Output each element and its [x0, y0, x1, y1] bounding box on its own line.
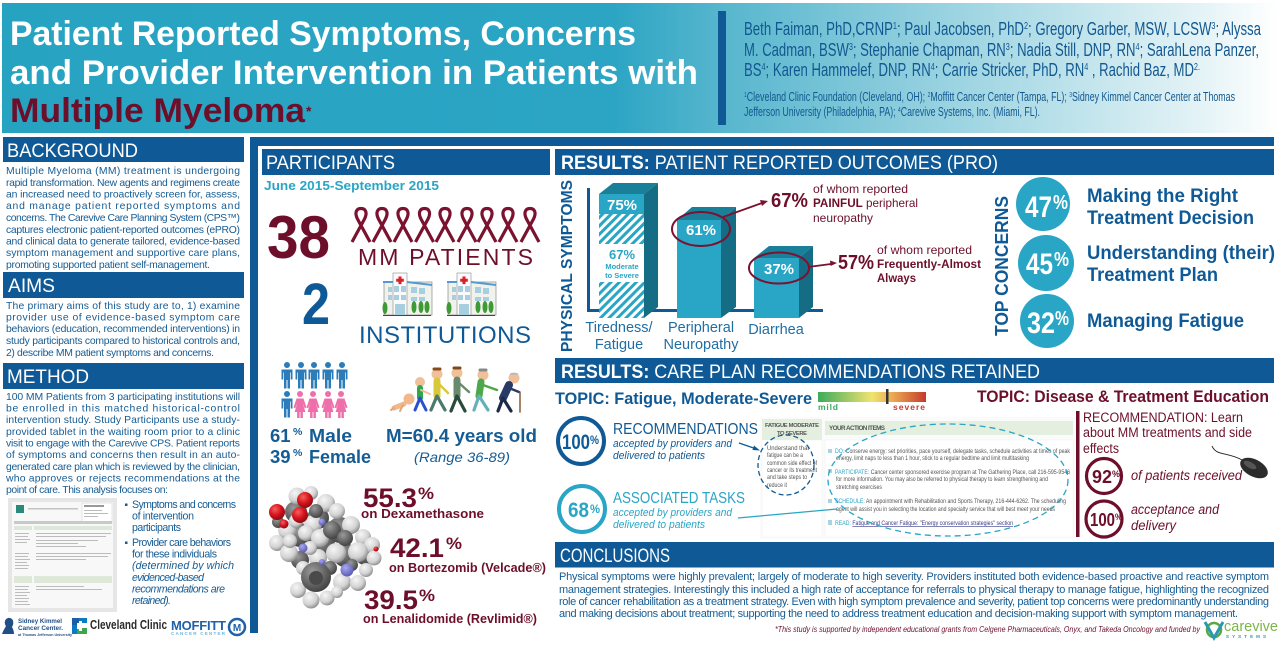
callout: diarrhea frequency: of whom reported [877, 243, 972, 257]
logo: Carevive [1205, 618, 1278, 639]
text: method body: generated care plan which is reviewed by the clinician, [6, 462, 240, 473]
text: focus bullets: recommendations are [132, 584, 225, 596]
authors: 4 [931, 62, 935, 73]
stat: 92% received: of patients received [1131, 468, 1242, 483]
stat: gender: % [293, 447, 303, 459]
care plan excerpt: DO: Conserve energy: set priorities, pace yourself, delegate tasks, schedule activities at times of peak [835, 448, 1071, 455]
concern: fatigue: 32 [1027, 307, 1055, 340]
text: conclusions body: and making decisions about treatment; supporting the need to address treatment education and decision-making support with symptom management. [559, 608, 1238, 620]
stat: dexamethasone [361, 483, 484, 521]
heading: method: METHOD [7, 366, 89, 388]
title: Patient Reported Symptoms, Concerns [10, 15, 636, 53]
heading: conclusions [555, 542, 1274, 568]
logo: Moffitt: CANCER CENTER [171, 631, 226, 636]
stat: age: M=60.4 years old [386, 425, 537, 446]
text: conclusions body: Physical symptoms were highly prevalent; largely of moderate to high severity. Providers instituted both evidence-based proactive and reactive symptom [559, 571, 1269, 583]
text: background body: symptom management and supportive care plans, [6, 248, 240, 259]
panel: results care plan [555, 358, 1274, 539]
text: method body: provided tablet in the waiting room prior to a clinic [6, 427, 240, 438]
callout: painful neuropathy [723, 182, 918, 225]
stat: bortezomib: on Bortezomib (Velcade®) [389, 561, 546, 575]
care plan excerpt: READ: Fatigue and Cancer Fatigue: "Energy conservation strategies" section [835, 520, 1013, 527]
axis title: PHYSICAL SYMPTOMS [559, 180, 576, 352]
text: aims body: study participants compared to historical controls and, [6, 336, 240, 347]
logo: Sidney Kimmel: Cancer Center. [18, 625, 63, 632]
authors: 4 [761, 62, 766, 73]
affiliations: Cleveland Clinic Foundation (Cleveland, OH); [747, 90, 928, 104]
text: focus bullets: of intervention [132, 510, 194, 522]
authors: 3 [849, 42, 853, 53]
header banner [2, 3, 1278, 133]
heading: results PRO: RESULTS: PATIENT REPORTED OUTCOMES (PRO) [561, 152, 998, 174]
text: background body: an increased need to proactively screen for, assess, [6, 190, 240, 200]
text: method body: intervention study. Study Participants use a study- [6, 415, 240, 426]
concern: treatment plan: % [1054, 249, 1069, 271]
stat: 100% recommendations: accepted by providers and [613, 438, 733, 450]
text: aims body: behaviors (education, recommended interventions) in [6, 324, 240, 335]
text: method body: point of care. This analysis focuses on: [6, 485, 168, 496]
affiliations: 3 [1069, 92, 1072, 99]
heading: aims: AIMS [8, 275, 55, 297]
severity scale [818, 389, 926, 412]
stat: 68% associated tasks: 68 [568, 499, 589, 522]
panel: conclusions [555, 542, 1274, 620]
stat: age [386, 368, 537, 465]
text: background body: promoting supported patient self-management. [6, 260, 210, 271]
stat: 100% recommendations: RECOMMENDATIONS [613, 421, 758, 438]
authors: ; Karen Hammelef, DNP, RN [766, 60, 931, 80]
stat: 2 institutions [302, 272, 531, 349]
panel: background [3, 137, 244, 271]
authors: 3 [1006, 42, 1010, 53]
authors: , Rachid Baz, MD [1088, 60, 1194, 80]
authors: 2. [1194, 62, 1200, 73]
stat: gender: 39 [270, 446, 291, 467]
stat: gender: Male [309, 425, 352, 446]
care plan excerpt: SCHEDULE: An appointment with Rehabilitation and Sports Therapy, 216-444-6262. The scheduling [835, 498, 1066, 505]
recommendation: education: about MM treatments and side [1083, 425, 1252, 440]
authors: ; Gregory Garber, MSW, LCSW [1028, 19, 1211, 39]
text: aims body: provider use of evidence-based symptom care [6, 312, 240, 324]
authors: 3 [1211, 21, 1216, 32]
concern: treatment plan [1018, 235, 1275, 291]
care plan excerpt: Understand that [767, 445, 809, 452]
text: aims body: The primary aims of this study are to, 1) examine [6, 301, 240, 312]
stat: 100% acceptance [1086, 501, 1219, 537]
category labels: Diarrhea [748, 322, 805, 338]
category labels [585, 320, 805, 353]
panel: aims [3, 272, 244, 359]
bar: tiredness: 75% [607, 197, 637, 214]
arrow [723, 200, 768, 217]
icon: gender pictogram [282, 362, 348, 418]
text: method body: visit to engage with the Carevive CPS. Patient reports [6, 438, 240, 450]
affiliations: 4 [898, 107, 901, 114]
heading: background [3, 137, 244, 162]
stat: bortezomib: 42.1 [390, 533, 444, 563]
concern: treatment decision [1016, 177, 1254, 231]
text: method body: of symptoms and concerns then result in an auto- [6, 450, 240, 461]
affiliations: Moffitt Cancer Center (Tampa, FL); [930, 90, 1069, 104]
affiliations: Jefferson University (Philadelphia, PA); [744, 105, 960, 119]
category labels: Peripheral [668, 320, 734, 336]
institution logos [2, 618, 245, 637]
authors: 2 [1024, 21, 1028, 32]
panel: method [3, 363, 244, 612]
stat: 38 patients [267, 204, 539, 271]
stat: 38 patients: 38 [267, 204, 330, 271]
text: conclusions body: role of cancer rehabilitation as a treatment strategy. Even with high symptom prevalence and severity, patient top concerns were predominantly understanding [559, 596, 1269, 608]
stat: 68% associated tasks [559, 486, 745, 532]
care plan excerpt [758, 417, 1075, 539]
callout: diarrhea frequency [808, 243, 981, 285]
authors: Beth Faiman, PhD,CRNP [744, 19, 947, 39]
stat: 38 patients: MM PATIENTS [358, 244, 533, 270]
care plan excerpt: YOUR ACTION ITEMS [829, 425, 885, 432]
text: background body: concerns. The Carevive Care Planning System (CPS™) [6, 213, 240, 224]
care plan excerpt: for more information. You may also be referred to physical therapy to learn strengthening and [836, 476, 1048, 483]
text: method body [5, 392, 240, 496]
concern: treatment plan: Understanding (their) [1087, 243, 1275, 264]
stat: age: (Range 36-89) [414, 449, 510, 465]
bar: peripheral neuropathy [672, 207, 736, 318]
text: focus bullets: Provider care behaviors [132, 537, 231, 549]
top concerns [992, 177, 1275, 348]
stat: gender: 61 [270, 425, 291, 446]
stat: dexamethasone: on Dexamethasone [361, 507, 484, 521]
stat: 100% recommendations: delivered to patients [613, 450, 705, 462]
concern: treatment plan: 45 [1026, 248, 1053, 281]
severity scale: mild [818, 402, 838, 412]
concern: treatment plan: Treatment Plan [1087, 265, 1218, 286]
topic: fatigue: TOPIC: Fatigue, Moderate-Severe [555, 390, 812, 408]
footnote: funding: *This study is supported by independent educational grants from Celgene Pharmaceuticals, Onyx, and Takeda Oncology and funded by [775, 624, 1201, 634]
bar: diarrhea [749, 246, 813, 318]
care plan thumbnail [8, 498, 117, 612]
text: conclusions body [559, 571, 1269, 620]
arrow: recommendations [739, 443, 760, 450]
bar: diarrhea: 37% [764, 261, 794, 278]
text: focus bullets: retained). [132, 595, 171, 607]
authors: ; Stephanie Chapman, RN [853, 40, 1006, 60]
title [10, 15, 698, 130]
recommendation: education [1076, 410, 1271, 537]
authors: ; Carrie Stricker, PhD, RN [935, 60, 1084, 80]
care plan excerpt: energy, limit naps to less than 1 hour, stick to a regular bedtime and limit multitasking [836, 455, 1029, 462]
logo: Carevive: SYSTEMS [1226, 634, 1266, 639]
stat: lenalidomide: % [419, 586, 435, 605]
authors: BS [744, 60, 768, 80]
authors: 4 [1084, 62, 1089, 73]
stat: lenalidomide: 39.5 [364, 585, 418, 615]
text: method body: 100 MM Patients from 3 participating institutions will [6, 392, 240, 403]
stat: 92% received: % [1112, 469, 1120, 479]
text: background body [6, 166, 240, 271]
stat: 68% associated tasks: delivered to patients [613, 519, 705, 531]
text: focus bullets: evidenced-based [132, 572, 205, 584]
logo: Moffitt: M [233, 623, 241, 634]
authors: ; Alyssa [1216, 19, 1262, 39]
care plan excerpt: fatigue can be a [767, 452, 803, 459]
concern: treatment decision: % [1053, 192, 1068, 214]
affiliations: 2 [928, 92, 930, 99]
title: * [306, 103, 312, 119]
text: method body: who approves or rejects recommendations at the [5, 474, 240, 484]
icon: molecule [269, 486, 382, 608]
panel: results PRO [555, 149, 1275, 353]
stat: lenalidomide: on Lenalidomide (Revlimid®) [363, 612, 537, 626]
stat: 100% recommendations [558, 418, 758, 464]
header divider bar [718, 11, 726, 125]
care plan excerpt: agent will assist you in selecting the location and specialty service that will best meet your needs [836, 506, 1055, 513]
authors: M. Cadman, BSW [744, 40, 888, 60]
stat: 100% recommendations: % [590, 433, 599, 447]
concern: fatigue: Managing Fatigue [1087, 311, 1244, 332]
text: background body: and manage patient reported symptoms and [6, 201, 240, 212]
logo: Cleveland Clinic [72, 618, 167, 634]
care plan excerpt: common side effect of [767, 460, 817, 467]
care plan excerpt: PARTICIPATE: Cancer center sponsored exercise program at The Gathering Place, call 216-595-9546 [835, 469, 1070, 476]
stat: bortezomib [389, 533, 546, 575]
severity scale: severe [893, 402, 925, 412]
topic: disease and treatment education: TOPIC: Disease & Treatment Education [977, 388, 1269, 406]
logo: Carevive: carevive [1224, 618, 1278, 635]
heading: participants [262, 149, 550, 175]
top rule and column divider [250, 137, 1274, 633]
callout: painful neuropathy: neuropathy [813, 211, 873, 225]
bar: tiredness: to Severe [605, 271, 639, 280]
date range: June 2015-September 2015 [264, 179, 439, 193]
bar: tiredness: Moderate [605, 262, 639, 271]
text: focus bullets: (determined by which [132, 560, 234, 572]
chart: physical symptoms [559, 180, 823, 353]
logo: Cleveland Clinic: Cleveland Clinic [90, 618, 167, 632]
stat: 92% received: 92 [1092, 467, 1112, 487]
heading: care plan: RESULTS: CARE PLAN RECOMMENDATIONS RETAINED [561, 361, 1040, 383]
text: focus bullets [125, 499, 236, 607]
bar: tiredness: 67% [609, 247, 635, 262]
highlight: action items [828, 424, 1068, 536]
icon: ages of life figures [391, 368, 520, 412]
care plan excerpt: reduce it [767, 482, 787, 489]
stat: 68% associated tasks: ASSOCIATED TASKS [613, 490, 745, 507]
stat: lenalidomide [363, 585, 537, 626]
stat: 100% acceptance: delivery [1131, 518, 1177, 533]
concern: fatigue: % [1055, 308, 1069, 330]
authors [744, 19, 1262, 80]
stat: gender [270, 362, 371, 467]
stat: dexamethasone: 55.3 [363, 483, 417, 513]
callout: diarrhea frequency: Frequently-Almost [877, 259, 981, 271]
stat: gender: % [293, 426, 303, 438]
icon: ribbons [352, 208, 539, 242]
authors: ; Paul Jacobsen, PhD [897, 19, 1024, 39]
stat: 68% associated tasks: % [590, 502, 600, 516]
text: background body: captures electronic patient-reported outcomes (ePRO) [6, 225, 240, 236]
callout: diarrhea frequency: Always [877, 273, 916, 285]
affiliations: Carevive Systems, Inc. (Miami, FL). [901, 105, 1040, 119]
category labels: Tiredness/ [585, 320, 654, 336]
stat: 100% recommendations: 100 [562, 431, 590, 454]
stat: 2 institutions: 2 [302, 272, 330, 337]
care plan excerpt: FATIGUE MODERATE [765, 423, 819, 429]
stat: bortezomib: % [446, 534, 462, 553]
care plan excerpt: and take steps to [767, 474, 807, 481]
axes [587, 188, 823, 312]
care plan excerpt: cancer or its treatment [767, 467, 817, 474]
stat: 92% received [1086, 458, 1242, 494]
heading: results PRO [555, 149, 1274, 175]
text: background body: Multiple Myeloma (MM) treatment is undergoing [6, 166, 240, 177]
stat: 100% acceptance: acceptance and [1131, 502, 1219, 517]
stat: dexamethasone: % [418, 484, 434, 503]
logo: Moffitt: MOFFITT [171, 618, 226, 633]
icon: hospitals [382, 273, 496, 316]
heading: care plan [555, 358, 1274, 383]
concern: treatment decision: Treatment Decision [1087, 208, 1254, 229]
callout: diarrhea frequency: 57% [838, 252, 874, 274]
bar: peripheral neuropathy: 61% [686, 222, 716, 239]
text: method body: be enrolled in this matched historical-control [6, 404, 240, 414]
title: Multiple Myeloma [10, 92, 306, 130]
recommendation: education: effects [1083, 441, 1119, 456]
text: conclusions body: management strategies. Interestingly this included a high rate of acceptance for referrals to physical therapy to manage fatigue, highlighting the recognized [559, 584, 1269, 596]
stat: gender: Female [309, 446, 371, 467]
icon: mouse [1212, 446, 1271, 483]
logo: Sidney Kimmel: at Thomas Jefferson University [18, 633, 73, 637]
heading: method [3, 363, 244, 389]
heading: background: BACKGROUND [7, 140, 138, 162]
text: background body: rapid transformation. New agents and regimens create [6, 178, 240, 189]
stat: 100% acceptance: 100 [1090, 510, 1115, 530]
authors: ; Nadia Still, DNP, RN [1010, 40, 1136, 60]
text: focus bullets: for these individuals [132, 548, 217, 560]
callout: painful neuropathy: PAINFUL peripheral [813, 196, 918, 210]
category labels: Fatigue [595, 337, 643, 353]
highlight: understand [758, 435, 814, 495]
stat: 100% acceptance: % [1115, 512, 1122, 522]
panel: participants [262, 149, 550, 626]
authors: 4 [1136, 42, 1140, 53]
top concerns: TOP CONCERNS [992, 196, 1012, 336]
authors: 1 [893, 21, 897, 32]
stat: 68% associated tasks: accepted by providers and [613, 507, 733, 519]
text: background body: and clinical data to generate tailored, evidence-based [6, 236, 240, 248]
text: aims body [6, 301, 240, 359]
callout: painful neuropathy: 67% [771, 190, 808, 212]
heading: aims [3, 272, 244, 298]
logo: Sidney Kimmel [2, 618, 73, 637]
care plan excerpt: stretching exercises [836, 484, 882, 491]
concern: treatment decision: Making the Right [1087, 186, 1239, 207]
concern: treatment decision: 47 [1025, 191, 1052, 224]
heading: conclusions: CONCLUSIONS [560, 545, 670, 567]
affiliations: 1 [744, 92, 747, 99]
concern: fatigue [1020, 294, 1244, 348]
logo: Sidney Kimmel: Sidney Kimmel [18, 618, 62, 625]
arrow: associated tasks [738, 509, 837, 518]
title: and Provider Intervention in Patients with [10, 54, 698, 92]
care plan excerpt: TO SEVERE [777, 431, 807, 437]
stat: 2 institutions: INSTITUTIONS [359, 322, 531, 349]
logo: Moffitt [171, 618, 245, 636]
category labels: Neuropathy [664, 337, 739, 353]
text: aims body: 2) describe MM patient symptoms and concerns. [6, 348, 214, 359]
callout: painful neuropathy: of whom reported [813, 182, 908, 196]
text: focus bullets: Symptoms and concerns [132, 499, 236, 511]
affiliations [744, 90, 1235, 119]
bar: tiredness [599, 183, 658, 318]
text: focus bullets: participants [132, 522, 181, 534]
arrow [808, 260, 837, 267]
recommendation: education: RECOMMENDATION: Learn [1083, 410, 1243, 425]
heading: participants: PARTICIPANTS [266, 152, 395, 174]
